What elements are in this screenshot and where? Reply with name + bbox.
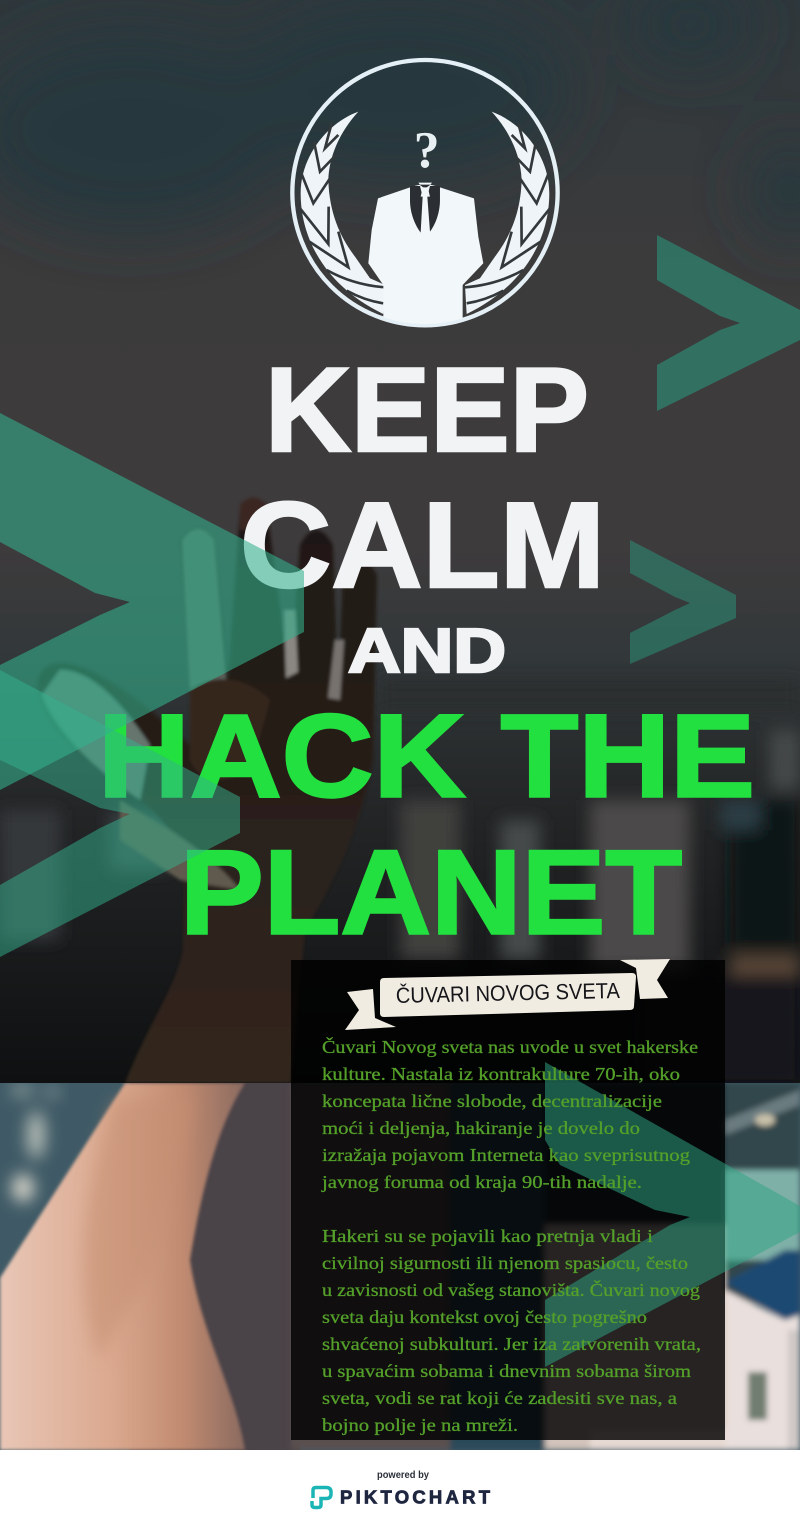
title line: keep: KEEP <box>265 343 589 477</box>
banner: section heading <box>345 959 670 1030</box>
text block: second paragraph: shvaćenoj subkulturi. Jer iza zatvorenih vrata, <box>322 1334 701 1354</box>
title: hack the planet <box>98 690 755 960</box>
piktochart wordmark: PIKTOCHART <box>340 1486 491 1508</box>
title line: hack the: HACK THE <box>98 690 755 822</box>
suit figure <box>368 183 483 327</box>
laurel wreath right <box>465 112 550 314</box>
laurel wreath left <box>300 112 385 314</box>
chevron: lower left <box>0 670 240 957</box>
background photo: upper darkened sky and city <box>0 0 800 1085</box>
text block: second paragraph: Hakeri su se pojavili kao pretnja vladi i <box>322 1226 653 1246</box>
chevron: middle right <box>630 540 736 664</box>
hand silhouette <box>37 498 377 1083</box>
background photo: lower bright arm and buildings <box>0 1082 800 1450</box>
text block: second paragraph: civilnoj sigurnosti ili njenom spasiocu, često <box>322 1253 688 1273</box>
chevron: inside panel <box>545 1062 800 1367</box>
logo: anonymous emblem <box>292 60 558 327</box>
panel: text background <box>291 960 725 1440</box>
footer: powered by piktochart <box>0 1450 800 1530</box>
text block: first paragraph: moći i deljenja, hakiranje je dovelo do <box>322 1118 640 1138</box>
banner right tail <box>620 959 670 999</box>
powered by label: powered by <box>377 1470 429 1481</box>
text block: first paragraph <box>321 1036 698 1192</box>
question mark: ? <box>414 122 440 179</box>
text block: second paragraph <box>322 1226 701 1435</box>
banner left tail <box>345 989 396 1030</box>
text block: first paragraph: izražaja pojavom Interneta kao sveprisutnog <box>322 1145 690 1165</box>
icon: piktochart logo <box>312 1488 331 1508</box>
title line: and: AND <box>348 617 506 686</box>
text block: second paragraph: bojno polje je na mreži. <box>322 1415 518 1435</box>
banner main strip <box>380 973 636 1017</box>
text block: second paragraph: u spavaćim sobama i dnevnim sobama širom <box>322 1361 691 1381</box>
text block: first paragraph: javnog foruma od kraja 90-tih nadalje. <box>321 1172 642 1192</box>
arrows: teal chevrons <box>0 235 800 1367</box>
text block: second paragraph: u zavisnosti od vašeg stanovišta. Čuvari novog <box>322 1279 700 1300</box>
text block: first paragraph: kulture. Nastala iz kontrakulture 70-ih, oko <box>322 1064 680 1084</box>
text block: second paragraph: sveta, vodi se rat koji će zadesiti sve nas, a <box>322 1388 677 1408</box>
text block: second paragraph: sveta daju kontekst ovoj često pogrešno <box>322 1307 647 1327</box>
chevron: large left <box>0 413 304 790</box>
title line: planet: PLANET <box>180 826 682 960</box>
text block: first paragraph: koncepata lične slobode, decentralizacije <box>322 1091 662 1111</box>
emblem ring <box>292 60 558 325</box>
text block: first paragraph: Čuvari Novog sveta nas uvode u svet hakerske <box>322 1036 698 1057</box>
banner heading: ČUVARI NOVOG SVETA <box>396 978 620 1008</box>
title: keep calm and <box>240 343 605 686</box>
chevron: top right <box>657 235 800 411</box>
title line: calm: CALM <box>240 477 605 613</box>
